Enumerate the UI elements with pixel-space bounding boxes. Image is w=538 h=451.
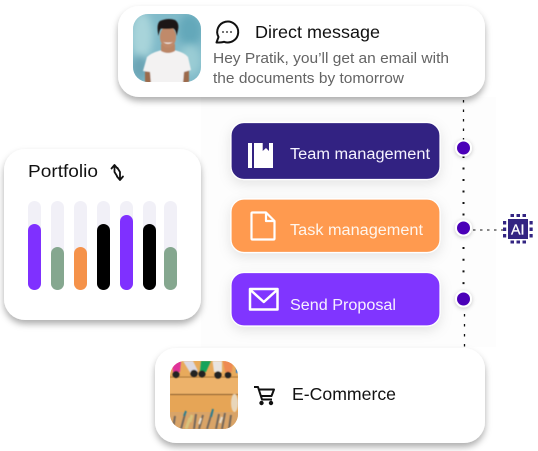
button: task management — [231, 199, 440, 252]
button: send proposal — [231, 272, 440, 326]
label: task management: Task management — [290, 222, 424, 239]
connector: dashed line to AI chip — [473, 229, 503, 231]
panel: direct message card — [118, 6, 485, 97]
node: task management — [456, 220, 471, 236]
button: team management — [231, 122, 440, 180]
icon: sort arrows — [112, 165, 123, 180]
icon: envelope — [250, 289, 278, 310]
icon: chat bubble — [216, 21, 238, 42]
icon: shopping cart — [254, 387, 274, 404]
heading: e-commerce: E-Commerce — [292, 384, 396, 404]
connector: vertical dotted line — [464, 100, 465, 350]
icon: book — [248, 143, 273, 168]
shop photo: paint tubes on wood — [170, 361, 239, 429]
label: team management: Team management — [290, 146, 431, 163]
node: team management — [456, 140, 471, 156]
icon: document — [252, 212, 274, 240]
bar chart — [28, 201, 177, 290]
message text: Hey Pratik, you’ll get an email with — [213, 50, 449, 67]
label: send proposal: Send Proposal — [290, 297, 396, 314]
icon: AI chip — [503, 214, 533, 244]
panel: e-commerce card — [155, 348, 485, 443]
panel: portfolio card — [4, 149, 201, 320]
icon: AI chip: AI — [511, 222, 524, 238]
message text — [213, 50, 449, 87]
message text: the documents by tomorrow — [213, 70, 404, 87]
heading: portfolio: Portfolio — [28, 161, 98, 181]
background panel — [201, 97, 496, 347]
heading: direct message: Direct message — [255, 22, 380, 42]
node: send proposal — [456, 292, 471, 306]
avatar photo — [131, 12, 202, 84]
